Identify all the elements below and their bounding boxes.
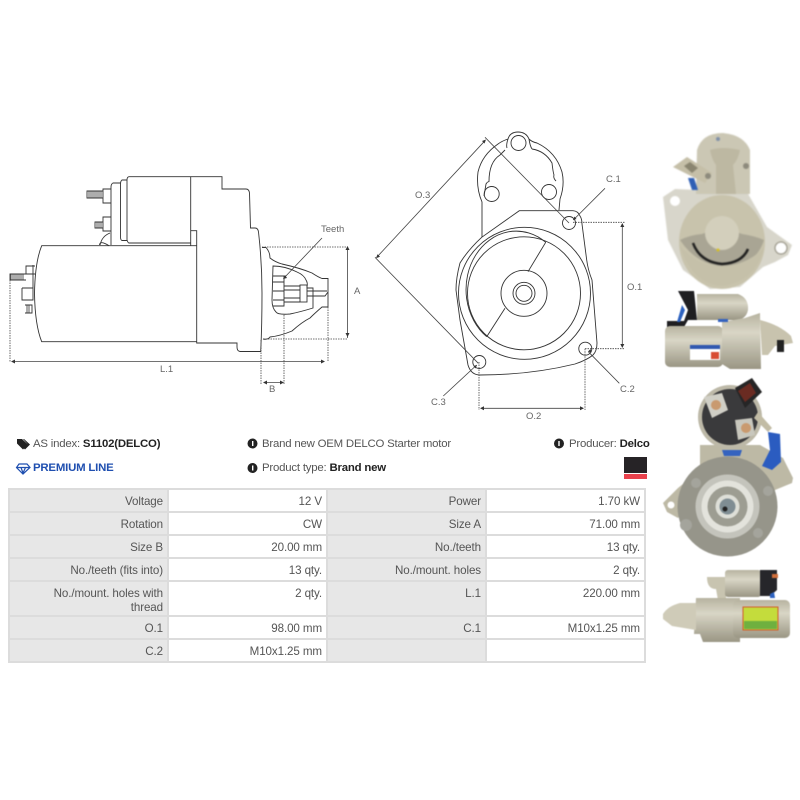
specifications table: 2 qty. — [613, 564, 640, 577]
upper lobe holes — [511, 136, 526, 150]
side view dimension lines — [10, 238, 350, 384]
label: C.3: C.3 — [431, 397, 446, 408]
end plate — [678, 456, 778, 556]
front view technical drawing — [456, 132, 597, 375]
nose — [663, 603, 696, 630]
specifications table: 71.00 mm — [589, 518, 640, 531]
upper lobe outline — [478, 132, 563, 237]
mounting plate outline — [456, 211, 597, 375]
specifications table: C.2 — [145, 645, 163, 658]
premium line: PREMIUM LINE — [33, 462, 114, 474]
flange — [663, 189, 792, 289]
specifications table: No./teeth (fits into) — [70, 564, 163, 577]
rear terminals — [10, 189, 111, 313]
nose opening — [680, 230, 764, 266]
specifications table: thread — [131, 601, 163, 614]
flange holes — [670, 196, 680, 206]
label: C.1: C.1 — [606, 174, 621, 185]
body — [694, 598, 740, 642]
warning label — [743, 607, 778, 630]
label: O.2: O.2 — [526, 411, 541, 422]
description: Brand new OEM DELCO Starter motor — [262, 438, 451, 450]
specifications table: 2 qty. — [295, 587, 322, 600]
solenoid cap — [698, 385, 762, 449]
pinion nose cone — [262, 248, 328, 339]
specifications table: 98.00 mm — [271, 622, 322, 635]
specifications table: Size A — [449, 518, 481, 531]
bore circles — [458, 227, 590, 359]
solenoid — [707, 577, 726, 600]
label: O.3: O.3 — [415, 190, 430, 201]
specifications table — [8, 488, 646, 663]
connector — [735, 378, 762, 408]
specifications table: O.1 — [145, 622, 163, 635]
specifications table: CW — [303, 518, 322, 531]
housing and lugs — [663, 445, 793, 540]
colour swatch — [624, 457, 647, 479]
photo: starter side view one — [665, 291, 793, 369]
specifications table: Rotation — [121, 518, 163, 531]
specifications table: No./mount. holes with — [54, 587, 163, 600]
specifications table: C.1 — [463, 622, 481, 635]
specifications table: 13 qty. — [607, 541, 640, 554]
specifications table: Power — [449, 495, 481, 508]
photo: starter front nose view — [663, 133, 792, 289]
label: Teeth: Teeth — [321, 224, 344, 235]
label: B: B — [269, 384, 275, 395]
front view dimension lines — [375, 137, 625, 410]
photo: starter side view two — [663, 570, 790, 642]
specifications table: 1.70 kW — [598, 495, 640, 508]
specifications table: M10x1.25 mm — [250, 645, 322, 658]
side connector — [673, 157, 712, 183]
solenoid and drive housing — [100, 177, 262, 352]
motor body — [34, 246, 197, 342]
solenoid — [697, 294, 748, 320]
specifications table: No./mount. holes — [395, 564, 481, 577]
specifications table: Voltage — [125, 495, 163, 508]
drive housing — [722, 313, 761, 369]
AS index: AS index: S1102(DELCO) — [33, 438, 160, 450]
specifications table: 220.00 mm — [583, 587, 640, 600]
specifications table: Size B — [130, 541, 163, 554]
label: L.1: L.1 — [160, 364, 173, 375]
nose cone — [679, 195, 765, 289]
black terminal — [760, 570, 777, 596]
specifications table: 13 qty. — [289, 564, 322, 577]
blue label — [690, 345, 720, 360]
producer: Producer: Delco — [569, 438, 650, 450]
specifications table: L.1 — [465, 587, 481, 600]
mounting holes — [562, 216, 576, 230]
motor body — [665, 326, 723, 367]
specifications table: No./teeth — [435, 541, 481, 554]
label: C.2: C.2 — [620, 384, 635, 395]
top housing — [696, 133, 750, 194]
black connector — [667, 291, 697, 327]
blue wire — [762, 432, 781, 470]
specifications table: 12 V — [299, 495, 322, 508]
label: O.1: O.1 — [627, 282, 642, 293]
specifications table: M10x1.25 mm — [568, 622, 640, 635]
label: A: A — [354, 286, 360, 297]
specifications table: 20.00 mm — [271, 541, 322, 554]
product type: Product type: Brand new — [262, 462, 386, 474]
photo: starter rear view — [663, 378, 793, 556]
